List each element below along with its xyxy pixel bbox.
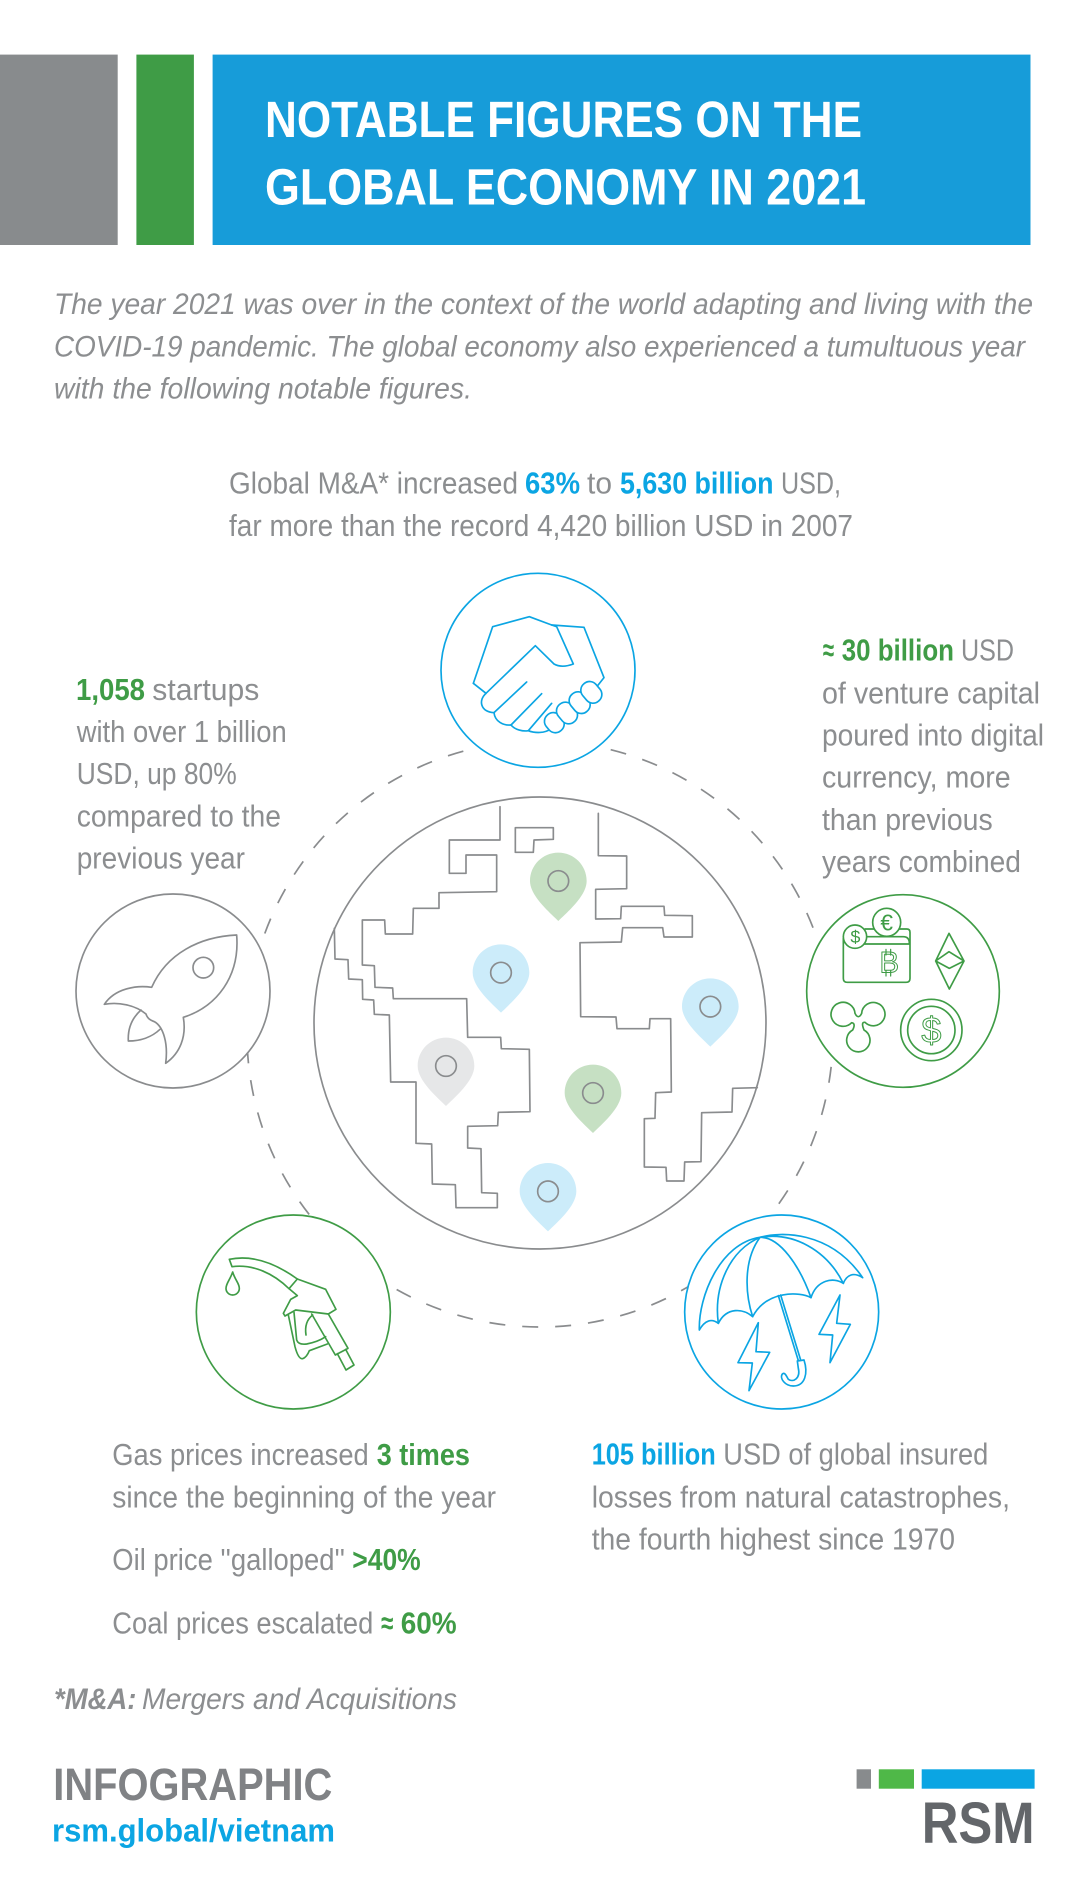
- map pin: blue east: [682, 978, 739, 1047]
- venture capital text: poured into digital: [822, 717, 1044, 752]
- map pin: grey: [418, 1038, 474, 1106]
- grey block: [0, 55, 118, 245]
- continents: [334, 807, 757, 1208]
- insured losses text: USD of global insured: [723, 1436, 988, 1471]
- M&A statistic text: [229, 466, 853, 543]
- venture capital text: USD: [961, 633, 1014, 668]
- title: NOTABLE FIGURES ON THE: [265, 91, 862, 148]
- bitcoin mark: B: [880, 947, 899, 980]
- startups text: [76, 672, 287, 876]
- RSM logo: [857, 1769, 1035, 1856]
- insured losses text: losses from natural catastrophes,: [592, 1479, 1010, 1514]
- M&A statistic text: far more than the record 4,420 billion USD in 2007: [229, 508, 853, 543]
- venture capital text: ≈: [823, 633, 834, 668]
- ethereum diamond: [936, 933, 964, 989]
- venture capital text: 30 billion: [842, 633, 954, 668]
- icon: digital currencies: $: [921, 1010, 941, 1051]
- icon: fuel nozzle: [196, 1215, 390, 1409]
- blue title panel: [213, 55, 1031, 245]
- green block: [136, 55, 194, 245]
- intro text: [54, 288, 1033, 405]
- venture capital text: currency, more: [822, 760, 1011, 795]
- map pin: blue south: [520, 1163, 576, 1231]
- energy prices text: ≈: [381, 1605, 393, 1640]
- energy prices text: [112, 1437, 496, 1640]
- title: [265, 91, 866, 216]
- M&A statistic text: to: [587, 466, 612, 500]
- footer label: INFOGRAPHIC: [53, 1759, 332, 1810]
- venture capital text: of venture capital: [822, 675, 1040, 710]
- wallet: [843, 929, 910, 982]
- icon: rocket: [76, 894, 270, 1088]
- icon: handshake: [441, 573, 635, 767]
- icon: digital currencies: [807, 895, 999, 1087]
- footnote: *M&A:: [54, 1683, 136, 1716]
- venture capital text: years combined: [822, 844, 1021, 879]
- insured losses text: the fourth highest since 1970: [592, 1521, 955, 1556]
- insured losses text: 105 billion: [592, 1436, 716, 1471]
- intro text: with the following notable figures.: [54, 372, 472, 405]
- venture capital text: than previous: [822, 802, 993, 837]
- startups text: USD, up 80%: [77, 756, 237, 791]
- header band: [0, 55, 1030, 245]
- RSM logo: RSM: [922, 1791, 1035, 1856]
- euro coin: [873, 908, 901, 936]
- globe: [314, 797, 766, 1249]
- M&A statistic text: USD,: [781, 466, 841, 500]
- small dollar coin: [843, 925, 867, 948]
- energy prices text: Oil price ''galloped'': [112, 1542, 345, 1577]
- energy prices text: 60%: [401, 1605, 457, 1640]
- large dollar coin: [901, 999, 962, 1061]
- M&A statistic text: Global M&A* increased: [229, 466, 518, 500]
- map pin: green north: [530, 853, 587, 921]
- startups text: startups: [152, 672, 259, 707]
- icon: digital currencies: €: [880, 910, 893, 936]
- M&A statistic text: 5,630 billion: [620, 466, 774, 500]
- startups text: with over 1 billion: [76, 714, 287, 749]
- footer link: rsm.global/vietnam: [52, 1813, 335, 1849]
- energy prices text: >40%: [352, 1542, 421, 1577]
- M&A statistic text: 63%: [525, 466, 580, 500]
- map pin: blue west: [473, 944, 529, 1013]
- venture capital text: [822, 633, 1044, 879]
- insured losses text: [592, 1436, 1010, 1556]
- ripple mark: [831, 1002, 885, 1052]
- energy prices text: since the beginning of the year: [112, 1479, 496, 1514]
- footnote: Mergers and Acquisitions: [142, 1683, 457, 1716]
- dashed orbit ring: [247, 741, 833, 1327]
- startups text: previous year: [77, 841, 245, 876]
- energy prices text: Coal prices escalated: [112, 1605, 373, 1640]
- startups text: 1,058: [76, 672, 145, 707]
- title: GLOBAL ECONOMY IN 2021: [265, 159, 866, 216]
- map pin: green south: [565, 1065, 621, 1133]
- intro text: COVID-19 pandemic. The global economy also experienced a tumultuous year: [54, 330, 1026, 363]
- startups text: compared to the: [77, 799, 281, 834]
- energy prices text: Gas prices increased: [112, 1437, 369, 1472]
- energy prices text: 3 times: [377, 1437, 470, 1472]
- icon: digital currencies: $: [850, 927, 860, 947]
- intro text: The year 2021 was over in the context of the world adapting and living with the: [54, 288, 1033, 321]
- icon: umbrella and lightning: [685, 1215, 879, 1409]
